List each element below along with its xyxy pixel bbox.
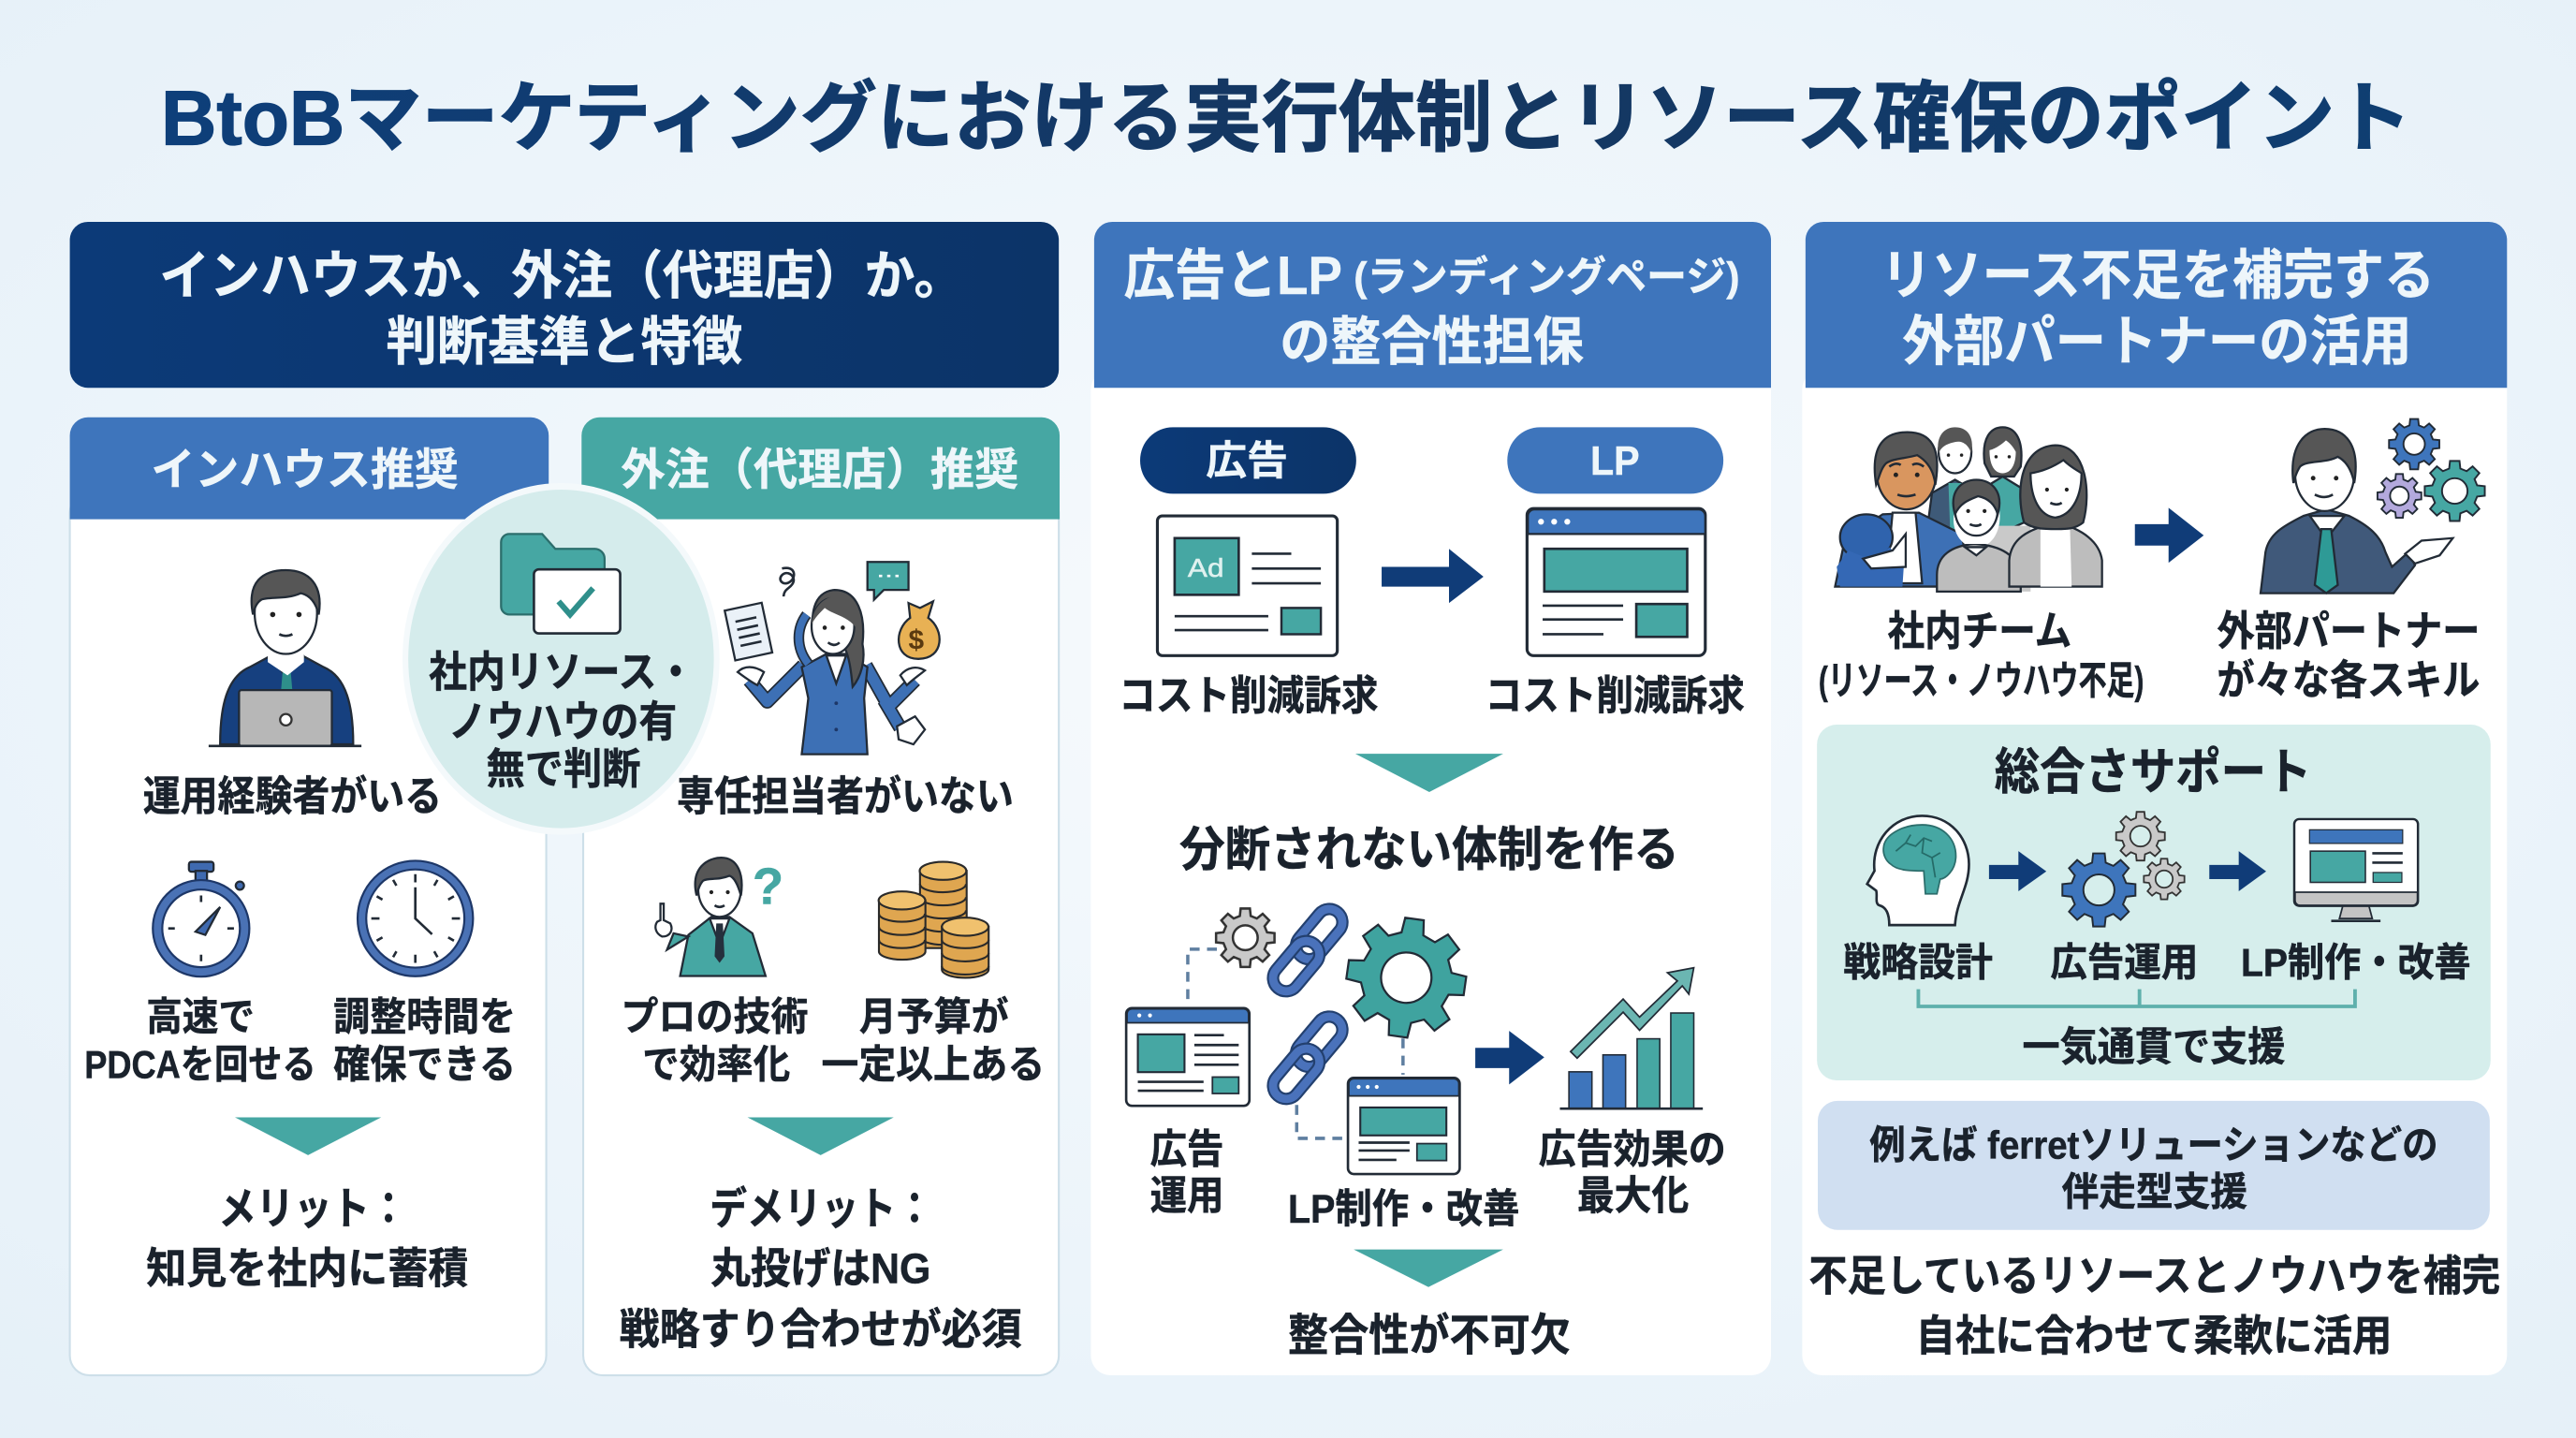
icon: LP window [1348, 1078, 1459, 1174]
icon: overwhelmed woman: $ [909, 624, 925, 655]
chart: growth bars [1559, 968, 1703, 1108]
panel: inhouse vs outsourcing [70, 222, 1060, 1375]
labels: support stages: 広告運用 [2050, 941, 2198, 985]
label: in-house team: 社内チーム [1888, 609, 2071, 654]
arrow [2209, 851, 2266, 891]
icon: stopwatch [157, 862, 244, 972]
icon: coin stacks [879, 862, 988, 977]
icon: LP page [1527, 508, 1705, 655]
icon: man at laptop [209, 570, 361, 746]
text: pro skills [621, 994, 809, 1086]
text: monthly budget [822, 994, 1045, 1086]
text: pro skills: プロの技術 [621, 994, 809, 1038]
pill: ad [1140, 427, 1356, 493]
diagram: connected workflow [1126, 903, 1703, 1174]
arrow: down to demerit [748, 1117, 894, 1155]
icon: small gear [1216, 908, 1275, 967]
heading: inhouse or agency [70, 222, 1059, 388]
box: ferret example: 伴走型支援 [2062, 1169, 2247, 1213]
arrow: down [1355, 754, 1503, 792]
bracket [1918, 990, 2355, 1006]
icon: in-house team [1835, 427, 2102, 592]
icon: overwhelmed woman [724, 562, 940, 755]
callout: decision circle: 無で判断 [487, 745, 640, 793]
text: coordination time: 確保できる [333, 1042, 516, 1086]
conclusion: 不足しているリソースとノウハウを補完 [1808, 1253, 2500, 1300]
box: total support [1817, 725, 2491, 1080]
demerit text: 戦略すり合わせが必須 [620, 1306, 1022, 1354]
demerit text [620, 1185, 1022, 1354]
box: ferret example: 例えば ferretソリューションなどの [1869, 1123, 2438, 1167]
icon: ad document: Ad [1188, 553, 1224, 582]
merit text [146, 1185, 468, 1293]
heading [1806, 222, 2507, 388]
label: maximize ad effect: 広告効果の [1539, 1128, 1726, 1173]
icon: pro man with question [655, 858, 783, 976]
card: outsourcing recommended: 外注（代理店）推奨 [621, 446, 1018, 495]
demerit text: デメリット： [710, 1185, 933, 1235]
label: LP production: LP制作・改善 [1288, 1187, 1519, 1232]
arrow [1475, 1031, 1544, 1084]
panel: external partners [1802, 222, 2507, 1375]
label: 運用経験者がいる [143, 773, 442, 819]
label: maximize ad effect: 最大化 [1577, 1174, 1689, 1219]
conclusion [1808, 1253, 2500, 1360]
arrow: down to merit [235, 1117, 381, 1155]
label: 専任担当者がいない [677, 773, 1014, 819]
panel: ad and LP consistency [1090, 222, 1771, 1375]
label: external partner: 外部パートナー [2217, 609, 2480, 654]
heading: 広告とLP [1123, 246, 1342, 306]
text: fast PDCA: PDCAを回せる [84, 1042, 316, 1086]
heading: (ランディングページ) [1354, 255, 1740, 301]
icon: folder with check [501, 534, 621, 634]
icon: pro man with question: ? [753, 858, 783, 915]
labels: support stages: 戦略設計 [1843, 941, 1993, 985]
icon: ad document [1157, 516, 1338, 655]
callout: decision circle: ノウハウの有 [448, 697, 677, 745]
arrow: down [1354, 1250, 1503, 1287]
label: LP: コスト削減訴求 [1486, 673, 1745, 719]
subheading: 分断されない体制を作る [1179, 823, 1679, 876]
icon: ad window [1126, 1008, 1250, 1106]
label: in-house team [1819, 609, 2144, 703]
heading: リソース不足を補完する [1881, 246, 2435, 306]
title: BtoBマーケティングにおける実行体制とリソース確保のポイント [161, 75, 2411, 161]
labels: ad operation [1150, 1128, 1224, 1219]
text: monthly budget: 一定以上ある [822, 1042, 1045, 1086]
icon: partner with gears [2261, 419, 2485, 594]
text: fast PDCA: 高速で [146, 994, 255, 1038]
merit text: メリット： [218, 1185, 407, 1235]
text: fast PDCA [84, 994, 316, 1086]
label: maximize ad effect [1539, 1128, 1726, 1219]
heading [1094, 222, 1771, 388]
label: external partner: が々な各スキル [2217, 658, 2480, 704]
card: outsourcing recommended [581, 418, 1060, 1375]
pill: LP: LP [1590, 438, 1640, 484]
arrow [2135, 507, 2203, 563]
text: coordination time [333, 994, 516, 1086]
box: total support: 総合さサポート [1995, 744, 2311, 800]
text: monthly budget: 月予算が [859, 994, 1009, 1038]
icon: gears [2062, 812, 2185, 927]
text: one-stop support: 一気通貫で支援 [2023, 1025, 2285, 1070]
demerit text: 丸投げはNG [710, 1245, 930, 1293]
card: inhouse recommended [70, 418, 549, 1375]
heading: inhouse or agency: インハウスか、外注（代理店）か。 [159, 246, 964, 305]
icon: big gear [1339, 911, 1473, 1045]
heading: 外部パートナーの活用 [1902, 312, 2411, 372]
heading: の整合性担保 [1280, 312, 1584, 371]
merit text: 知見を社内に蓄積 [146, 1245, 468, 1293]
text: pro skills: で効率化 [642, 1042, 790, 1086]
icon: clock [362, 865, 469, 972]
icon: monitor [2294, 819, 2418, 921]
icon: upper chain [1267, 903, 1348, 997]
pill: ad: 広告 [1206, 439, 1288, 484]
labels: support stages [1843, 941, 2471, 985]
box: ferret example [1818, 1101, 2490, 1230]
labels: ad operation: 広告 [1150, 1128, 1224, 1173]
arrow [1382, 549, 1484, 603]
labels: ad operation: 運用 [1150, 1174, 1224, 1219]
label: external partner [2217, 609, 2480, 704]
conclusion: 自社に合わせて柔軟に活用 [1915, 1313, 2392, 1360]
pill: LP [1507, 427, 1723, 493]
icon: lower chain [1267, 1011, 1348, 1105]
heading: inhouse or agency: 判断基準と特徴 [386, 312, 742, 371]
callout: decision circle [402, 483, 720, 835]
callout: decision circle: 社内リソース・ [429, 649, 695, 697]
arrow [1989, 851, 2046, 891]
label: in-house team: (リソース・ノウハウ不足) [1819, 659, 2144, 703]
conclusion: 整合性が不可欠 [1288, 1312, 1571, 1361]
label: ad: コスト削減訴求 [1119, 673, 1379, 719]
icon: brain head [1867, 815, 1969, 925]
text: coordination time: 調整時間を [333, 994, 516, 1038]
card: inhouse recommended: インハウス推奨 [151, 446, 459, 495]
labels: support stages: LP制作・改善 [2241, 941, 2471, 985]
